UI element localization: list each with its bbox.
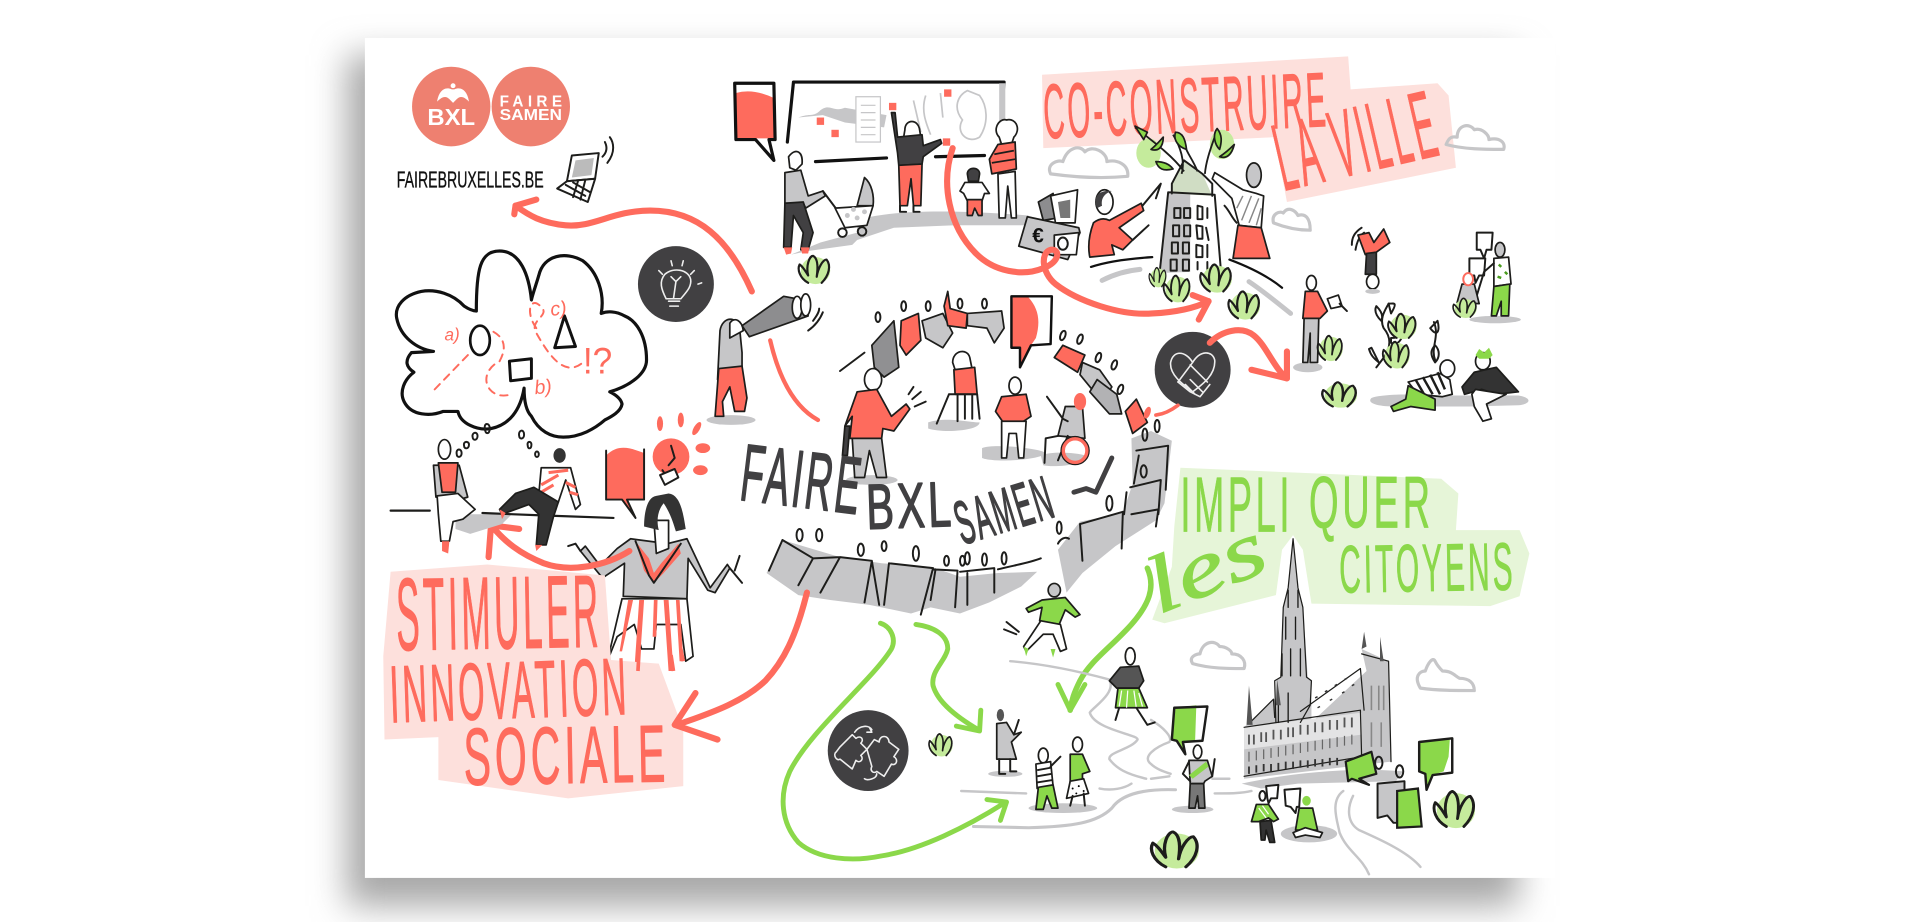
figures: couple with speech bubbles <box>1453 233 1521 323</box>
thought cloud: a) <box>444 324 460 344</box>
thought cloud <box>396 251 647 437</box>
small bush under board <box>799 256 830 284</box>
money box with euro: € <box>1032 224 1044 247</box>
heading background: co-construire <box>1042 56 1456 202</box>
bushes around building <box>1149 264 1260 320</box>
icon: laptop <box>557 137 613 202</box>
main title: faire bxl samen: SAMEN <box>946 463 1062 557</box>
small bush left of people <box>929 734 953 756</box>
town hall <box>1242 539 1403 789</box>
bush bottom right <box>1434 791 1475 828</box>
speech bubble: green mid <box>1172 705 1207 754</box>
figures: people thinking on the ground <box>391 424 613 553</box>
thought cloud: !? <box>583 340 612 381</box>
card shadow <box>347 55 1518 906</box>
logo: BXL Faire Samen <box>412 67 570 146</box>
speech bubble: red top <box>735 83 775 160</box>
seating arc: right <box>1054 330 1152 433</box>
heading: les: les <box>1132 503 1279 631</box>
arrow: woman to thinkers <box>489 525 629 568</box>
figure: seated woman <box>928 351 980 431</box>
heading: sociale: SOCIALE <box>463 709 670 803</box>
heading: impliquer: IMPLI <box>1180 460 1293 548</box>
heading: impliquer: QUER <box>1309 461 1434 544</box>
speech bubble and light bulb <box>606 413 710 518</box>
figure: handstand <box>1352 228 1390 294</box>
clouds: bottom <box>1191 642 1474 691</box>
figures: people chatting on the grass <box>1251 785 1337 842</box>
text: CITOYENS <box>1339 530 1516 608</box>
seating arc: bottom gray band <box>767 529 1041 615</box>
icon: handshake heart circle <box>1155 332 1231 408</box>
figures: people planting <box>1370 348 1528 421</box>
arrow: crowd to sociale <box>675 593 807 740</box>
figures: visitors at the board <box>784 113 1029 255</box>
figure: seated person in red <box>982 377 1046 460</box>
white poster card <box>365 38 1555 878</box>
money box with euro <box>1019 190 1080 260</box>
logo: BXL Faire Samen: SAMEN <box>500 107 562 124</box>
thought cloud: c) <box>549 297 568 321</box>
figure: person watering <box>1293 275 1347 372</box>
icon: light bulb circle <box>638 246 714 322</box>
text: INNOVATION <box>388 642 631 740</box>
arrow: vision to building <box>947 148 1209 320</box>
speech bubble: green right <box>1419 738 1452 790</box>
green arrow: to people <box>1058 568 1151 710</box>
heading background: impliquer les citoyens <box>1152 468 1529 623</box>
logo: BXL Faire Samen: BXL <box>427 104 475 130</box>
logo: BXL Faire Samen: FAIRE <box>500 94 562 111</box>
main title: faire bxl samen <box>736 428 1112 557</box>
figures: two people seen from behind <box>1375 757 1422 828</box>
figure: speaker in red <box>842 369 926 485</box>
bush bottom centre <box>1152 832 1199 868</box>
plants: vines and bushes <box>1318 303 1439 408</box>
winding roads <box>961 661 1420 874</box>
figure: person with scissors <box>1089 184 1161 257</box>
figure: person with green sash <box>1172 745 1215 813</box>
figure: person in wheelchair <box>1041 393 1089 466</box>
seating arc: top <box>840 291 1004 377</box>
re-drawn skirt hem over pink <box>638 649 683 671</box>
arrow stroke: binoculars to crowd <box>770 340 818 420</box>
arrow: handshake to plants <box>1156 330 1287 415</box>
ground lines around building <box>1091 257 1291 313</box>
speech bubble: large red centre <box>1011 296 1052 367</box>
figure: woman with red skirt <box>1212 163 1270 258</box>
text: STIMULER <box>395 554 603 672</box>
building with rooftop plants <box>1135 126 1234 273</box>
figure: jumping person <box>1004 583 1080 658</box>
speech bubble: green near hall <box>1346 752 1376 785</box>
figure: woman in green skirt <box>1109 648 1155 725</box>
website address: FAIREBRUXELLES.BE <box>397 166 544 192</box>
figure: person with binoculars <box>707 294 823 425</box>
main title: faire bxl samen: FAIRE <box>736 428 869 532</box>
text: LA VILLE <box>1264 71 1449 211</box>
heading background: stimuler innovation sociale <box>383 564 683 798</box>
figures: pair in conversation <box>1029 737 1097 813</box>
arrow: binoculars to website <box>514 200 752 291</box>
icon: puzzle circle <box>828 710 909 791</box>
whiteboard with sticky notes <box>787 82 1005 162</box>
green arrow: big loop <box>783 623 1007 859</box>
green arrow: short curve <box>916 624 981 731</box>
seating arc: right lower gray blob <box>1057 420 1172 593</box>
thought cloud: b) <box>533 376 553 399</box>
main title: faire bxl samen: BXL <box>865 469 956 543</box>
figure: person in gray coat <box>988 709 1022 777</box>
clouds: top <box>1049 126 1504 230</box>
figure: woman in gray sweater <box>568 493 742 671</box>
text: CO-CONSTRUIRE <box>1041 57 1330 155</box>
